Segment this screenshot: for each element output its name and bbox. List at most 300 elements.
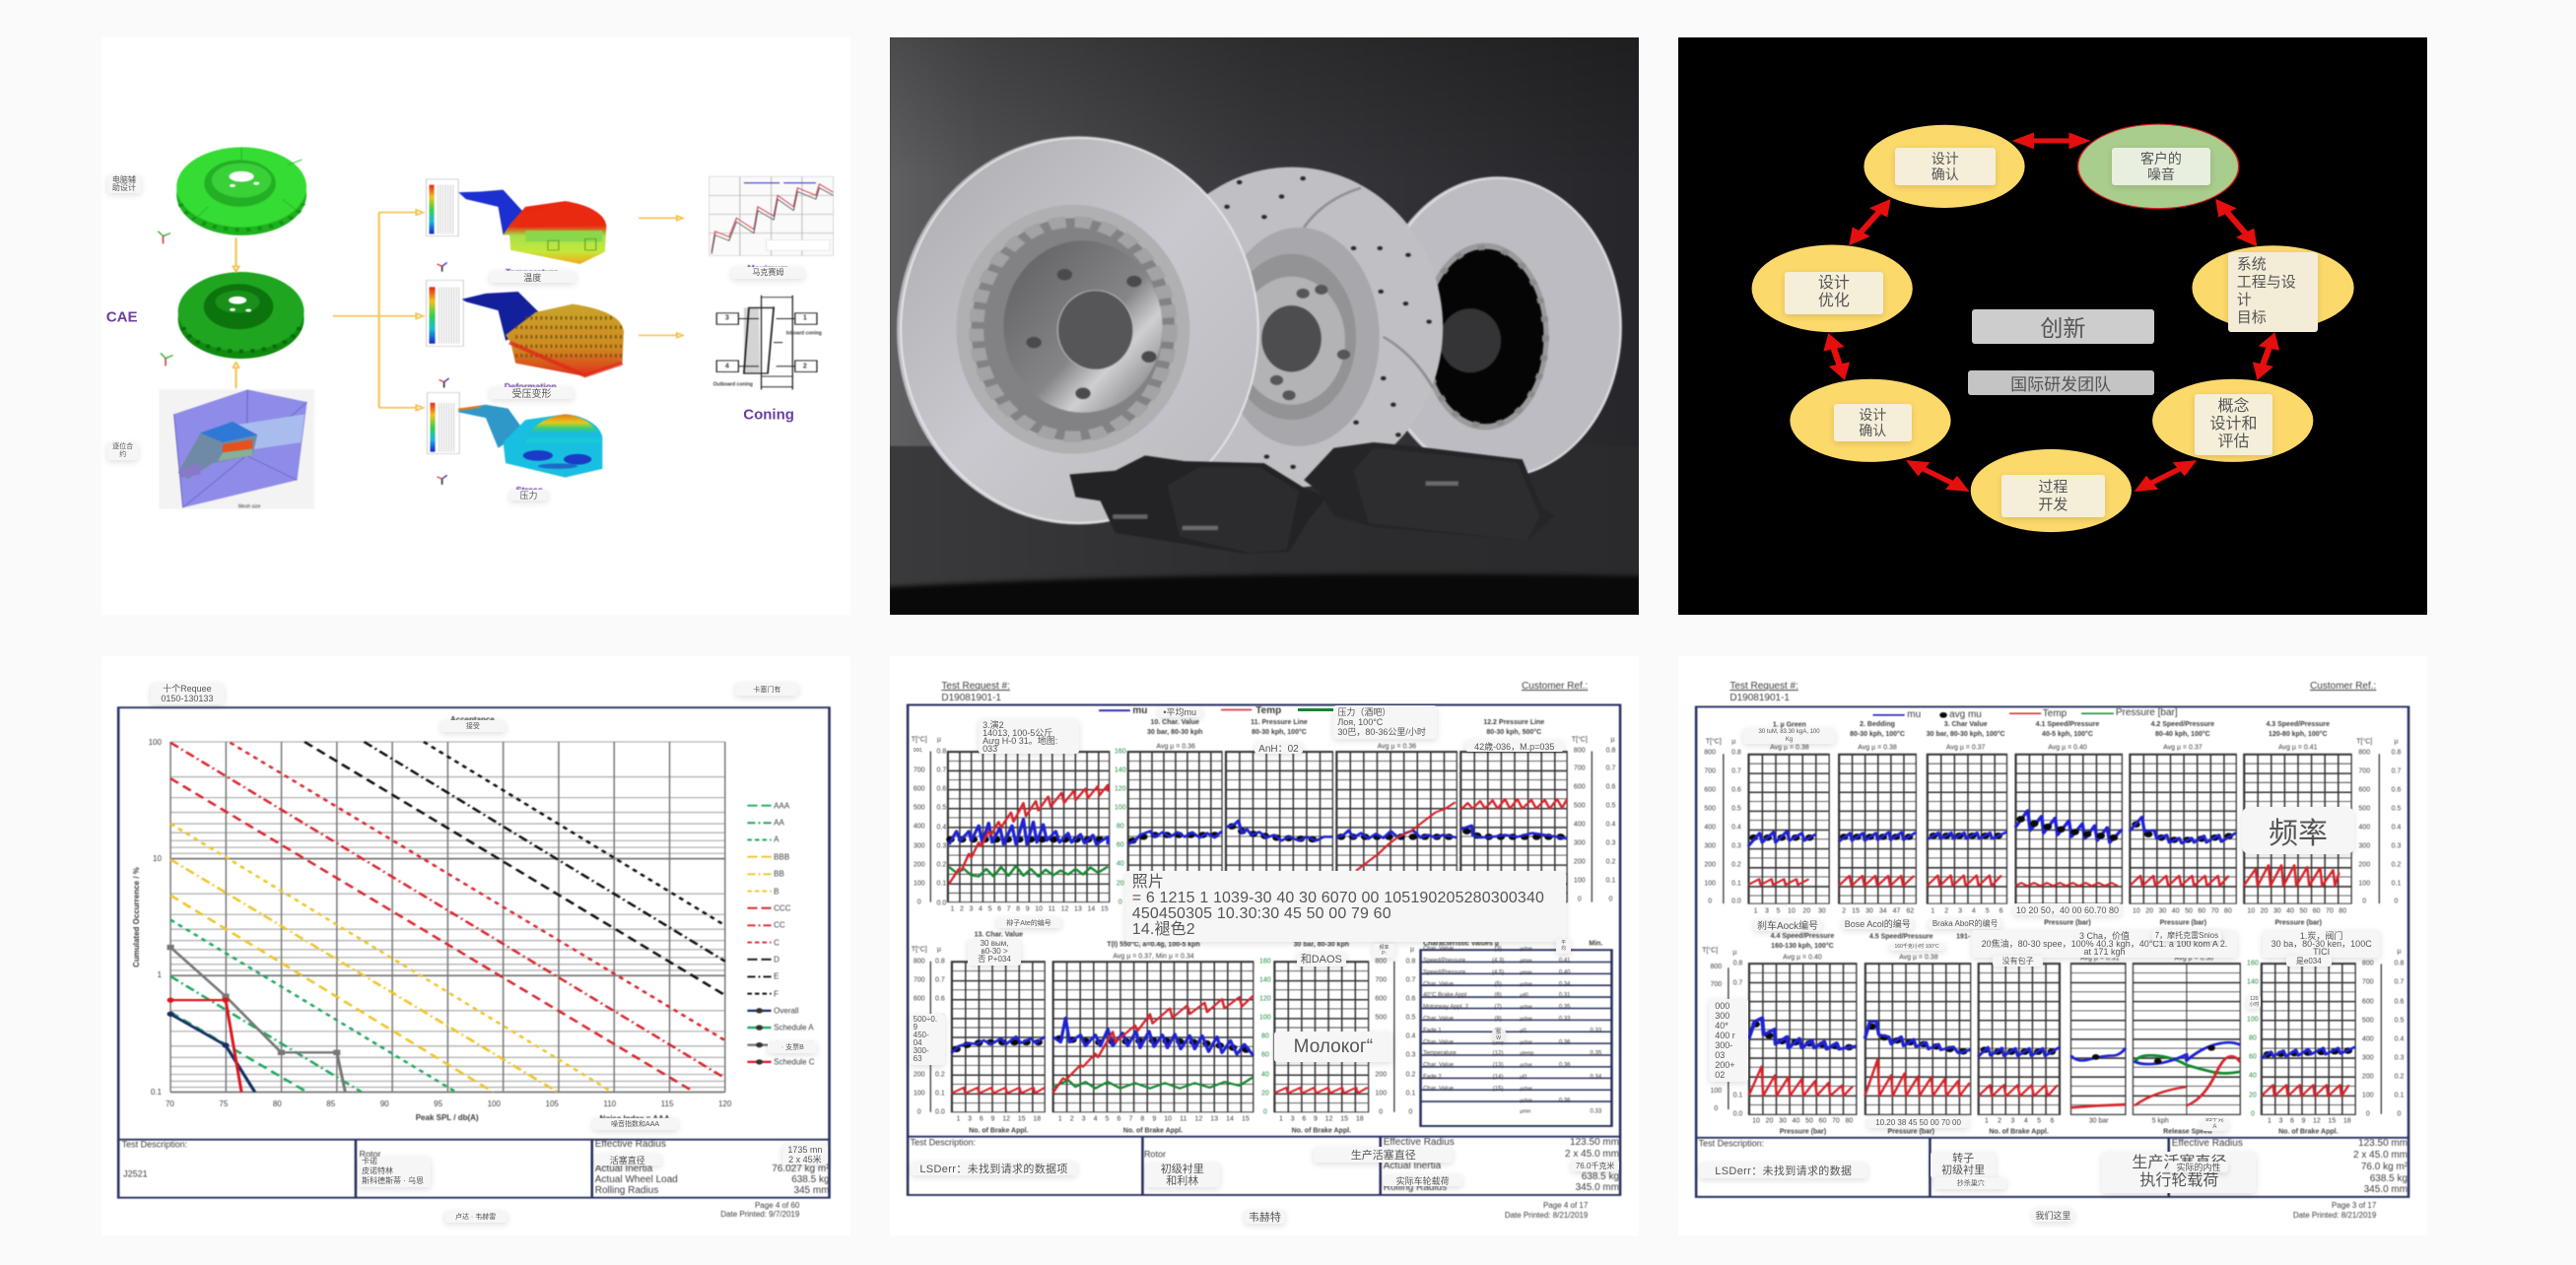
callout: green mu condition: 30 tuM, 83.30 kgA, 100	[1759, 729, 1820, 735]
callout: temperature	[490, 271, 576, 283]
report text and chart titles	[1698, 680, 2408, 1220]
report text and chart titles: 200	[1375, 1071, 1387, 1078]
report text and chart titles: 0	[2251, 1110, 2255, 1117]
callout: acceptance: 接受	[466, 723, 480, 730]
callout: rotor number: 辩子Ate的编号	[1006, 920, 1051, 927]
callout: kg note: A	[2212, 1124, 2216, 1130]
report text and chart titles: Page 3 of 17	[2332, 1201, 2376, 1210]
report text and chart titles: D19081901-1	[941, 693, 1001, 703]
callout: left axis values: 300	[1715, 1011, 1729, 1021]
plot axis and legend text: Peak SPL / db(A)	[416, 1113, 479, 1122]
callout: left axis values: 400 r	[1715, 1031, 1735, 1040]
report text and chart titles: µchar	[1520, 947, 1532, 953]
callout: tester name: 卢达 · 韦赫雷	[455, 1214, 496, 1221]
plot axis and legend text: Actual Inertia	[595, 1164, 652, 1174]
report text and chart titles: 100	[2358, 880, 2370, 887]
report text and chart titles: 200	[914, 1071, 925, 1078]
callout: small speed note	[1889, 943, 1945, 951]
report text and chart titles: 0.7	[1406, 976, 1415, 983]
callout: valve condition: 30 ba，80-30 ken，100C	[2271, 939, 2372, 949]
report text and chart titles: 300	[914, 842, 925, 849]
report text and chart titles: 80	[1261, 1033, 1269, 1040]
callout: concept design: 评估	[2217, 433, 2249, 450]
report text and chart titles: 0.1	[1733, 1093, 1742, 1099]
report text and chart titles: 638.5 kg	[2370, 1173, 2407, 1184]
report text and chart titles: 800	[2362, 961, 2374, 967]
report text and chart titles: 0.1	[1406, 1090, 1415, 1097]
callout: process development: 过程	[2038, 479, 2068, 496]
report text and chart titles: 700	[914, 976, 925, 983]
report text and chart titles: 100	[1375, 1090, 1387, 1097]
callout: schedule B	[768, 1041, 817, 1053]
report text and chart titles: 300	[1704, 842, 1716, 849]
report text and chart titles: Avg µ = 0.37, Min µ = 0.34	[1113, 953, 1194, 960]
report text and chart titles: Char. Value	[1423, 981, 1454, 987]
callout: contact: 逐位合	[112, 443, 133, 450]
report text and chart titles: µ	[937, 737, 941, 744]
small diagram text: 1	[803, 315, 807, 322]
icon: green brake disc CAD model	[176, 147, 306, 235]
callout: test 3 condition: Aưg H-0 31。地图:	[983, 736, 1057, 746]
callout: left axis values: 40*	[1715, 1021, 1729, 1031]
callout: process development: 开发	[2038, 497, 2068, 513]
report text and chart titles: 0	[1708, 899, 1712, 905]
report text and chart titles: 1. µ Green	[1773, 721, 1806, 728]
report text and chart titles: µf2	[1520, 1075, 1526, 1081]
report text and chart titles: µf1	[1520, 1028, 1526, 1033]
report text and chart titles: 0.1	[1606, 878, 1615, 885]
callout: char value condition: at 171 kgh	[2083, 947, 2126, 957]
callout: test 3 condition	[979, 719, 1079, 754]
report text and chart titles: 638.5 kg	[1582, 1171, 1619, 1182]
plot axis and legend text: 76.027 kg m²	[772, 1164, 830, 1174]
report text and chart titles: D19081901-1	[1729, 693, 1790, 703]
report text and chart titles: 120-80 kph, 100°C	[2269, 731, 2328, 738]
report text and chart titles: 0.41	[1559, 959, 1571, 965]
chart: deformation contour model	[426, 280, 624, 376]
plot axis and legend text: Date Printed: 9/7/2019	[720, 1210, 799, 1219]
report text and chart titles: (5)	[1494, 981, 1502, 987]
report text and chart titles: 0.1	[935, 1090, 945, 1097]
report text and chart titles: 0.7	[2395, 979, 2404, 986]
callout: inertia value: 76.0千克米	[1576, 1162, 1614, 1170]
report text and chart titles: 0.7	[2392, 768, 2401, 775]
callout: left axis values: 200+	[1715, 1060, 1735, 1070]
callout: average mu legend: •平均mu	[1163, 707, 1196, 717]
report text and chart titles: 1 3 6 9 12 15 18	[956, 1115, 1041, 1122]
report text and chart titles: 0.8	[2392, 750, 2401, 757]
callout: systems engineering	[2228, 252, 2318, 332]
callout: left axis values: 02	[1715, 1070, 1725, 1080]
callout: average 12.2: 42歳-036，M.p=035	[1474, 742, 1554, 752]
report text and chart titles: Page 4 of 17	[1543, 1201, 1588, 1210]
icon: axis triads	[158, 232, 449, 485]
callout: lookup error description: LSDerr：未找到请求的数据项	[919, 1164, 1068, 1175]
report text and chart titles: 0.2	[2395, 1073, 2404, 1080]
report text and chart titles: 0.4	[1606, 822, 1615, 829]
report text and chart titles: 100	[2362, 1092, 2374, 1099]
report text and chart titles: µ	[1410, 947, 1414, 954]
report text and chart titles: Effective Radius	[2172, 1138, 2243, 1149]
report text and chart titles: T[°C]	[1702, 948, 1718, 955]
legend samples	[1872, 713, 2114, 715]
chart: pressure line 12.2	[1460, 752, 1567, 902]
report text and chart titles: 0.8	[937, 748, 946, 755]
plot axis and legend text	[121, 715, 830, 1219]
report text and chart titles: 3. Char Value	[1944, 721, 1988, 728]
callout: deformation	[490, 387, 574, 399]
report text and chart titles: 500	[2358, 805, 2370, 812]
report text and chart titles: Avg µ = 0.40	[2048, 744, 2087, 751]
report text and chart titles: µ	[2397, 949, 2402, 956]
arrow: disc mesh flow up	[234, 237, 239, 388]
callout: DAOS	[1297, 952, 1346, 966]
report text and chart titles: T[°C]	[912, 947, 927, 954]
report text and chart titles: 0.3	[1731, 842, 1741, 849]
callout: speed axis note: 120	[2250, 996, 2259, 1002]
report text and chart titles: 400	[914, 824, 925, 831]
report text and chart titles: µchar	[1520, 1086, 1532, 1092]
chart: release speed	[2133, 964, 2240, 1114]
report text and chart titles: T[°C]	[1572, 737, 1588, 744]
callout: contact: 约	[119, 451, 126, 458]
report text and chart titles: 0.6	[1606, 784, 1615, 791]
chart: pressure line 11	[1226, 752, 1332, 902]
report text and chart titles: 700	[2358, 768, 2370, 775]
report text and chart titles: 4.2 Speed/Pressure	[2151, 721, 2214, 728]
plot axis and legend text: 10	[153, 854, 162, 863]
report text and chart titles: 345.0 mm	[1576, 1182, 1619, 1193]
report text and chart titles: 345.0 mm	[2364, 1184, 2407, 1195]
report text and chart titles: 0.31	[1559, 993, 1571, 999]
report text and chart titles: 0	[1379, 1108, 1383, 1115]
callout: small table note: W	[1496, 1035, 1501, 1041]
report text and chart titles: µmax	[1520, 969, 1532, 975]
report text and chart titles: 0.34	[1591, 1075, 1601, 1081]
report text and chart titles: 0.1	[2395, 1092, 2404, 1099]
callout: design validation lower: 设计	[1859, 407, 1886, 423]
callout: caliper: 卡塞门有	[753, 687, 780, 694]
panel: friction test report page 3	[1678, 656, 2427, 1235]
callout: wheel load	[1383, 1174, 1462, 1186]
callout: char value condition	[1972, 930, 2237, 958]
callout: left axis values	[1709, 999, 1748, 1082]
report text and chart titles: mu	[1132, 705, 1147, 716]
callout: char value condition: 3 Cha，价值	[2079, 931, 2130, 941]
report text and chart titles: Char. Value	[1423, 1039, 1454, 1045]
callout: maximum	[731, 267, 804, 279]
report text and chart titles: Avg µ = 0.38	[1770, 744, 1809, 751]
report text and chart titles: T[°C]	[2356, 738, 2372, 745]
report text and chart titles: Effective Radius	[1384, 1137, 1455, 1148]
report text and chart titles: 0.4	[1731, 824, 1741, 831]
heading: innovation	[1972, 309, 2154, 344]
callout: process development	[2001, 475, 2105, 517]
report text and chart titles: 120	[1259, 995, 1271, 1002]
report text and chart titles: 2 15 30 34 47 62	[1842, 907, 1914, 914]
callout: left axis values	[910, 1014, 945, 1065]
callout: average small	[1556, 939, 1571, 954]
callout: radius values	[782, 1144, 828, 1165]
report text and chart titles: 100	[1259, 1015, 1271, 1022]
plot axis and legend text: Effective Radius	[595, 1139, 666, 1150]
report text and chart titles: 600	[2358, 787, 2370, 794]
report text and chart titles: 0.35	[1559, 1005, 1571, 1011]
report text and chart titles: 700	[1375, 976, 1387, 983]
report text and chart titles: 800	[1574, 747, 1586, 754]
report text and chart titles: T[°C]	[1706, 738, 1722, 745]
callout: piston diameter	[1314, 1147, 1453, 1163]
report text and chart titles: 12.2 Pressure Line	[1483, 719, 1544, 726]
report text and chart titles: 0.5	[1606, 803, 1615, 810]
report text and chart titles: 0	[2366, 1110, 2370, 1117]
callout: design validation: 设计	[1932, 151, 1959, 166]
report text and chart titles: (13)	[1493, 1063, 1503, 1069]
report text and chart titles: 2 x 45.0 mm	[2353, 1150, 2407, 1161]
callout: fade data block	[1125, 871, 1566, 942]
report text and chart titles: No. of Brake Appl.	[2278, 1129, 2339, 1136]
report text and chart titles: 30 bar, 80-30 kph, 100°C	[1927, 731, 2005, 738]
plot axis and legend text: Schedule C	[774, 1057, 814, 1066]
plot axis and legend text: Acceptance	[450, 715, 495, 724]
report text and chart titles: 1 3 6 9 12 15 18	[1279, 1115, 1364, 1122]
callout: pressure ticks lower	[1867, 1116, 1969, 1128]
report text and chart titles: No. of Brake Appl.	[1989, 1129, 2049, 1136]
callout: char value condition: 20焦油，80-30 spee，100% 40.3 kgh，40°C1. a 100 kom A 2.	[1982, 939, 2227, 949]
plot axis and legend text: Rotor	[359, 1150, 380, 1160]
callout: design optimization: 优化	[1818, 293, 1850, 309]
callout: rotor notes	[358, 1157, 430, 1187]
plot axis and legend text: 70 75 80 85 90 95 100 105 110 115 120	[166, 1099, 731, 1108]
callout: green mu condition	[1743, 728, 1835, 743]
report frame	[908, 704, 1620, 1195]
callout: top axis	[911, 747, 925, 756]
callout: rotor notes: 卡诺	[362, 1157, 377, 1165]
report text and chart titles: 300	[1574, 840, 1586, 847]
report text and chart titles: 700	[2362, 979, 2374, 986]
callout: design optimization	[1785, 272, 1883, 314]
callout: small table note: 额	[1496, 1030, 1501, 1035]
callout: green mu condition: Kg	[1786, 737, 1793, 743]
callout: bose number: Bose Acol的编号	[1845, 919, 1911, 929]
report text and chart titles: 0.5	[937, 805, 946, 812]
chart: test 3 fade	[947, 752, 1110, 902]
report text and chart titles: 0.3	[1606, 840, 1615, 847]
plot axis and legend text: 345 mm	[793, 1185, 830, 1196]
callout: pressure legend line	[1298, 708, 1333, 711]
arrow: bidirectional red cycle arrows	[1831, 141, 2272, 488]
report text and chart titles: Customer Ref.:	[1522, 681, 1588, 692]
report text and chart titles: µ	[2394, 738, 2399, 745]
callout: average 12.2	[1465, 740, 1564, 752]
callout: frequency small: P:	[1382, 951, 1387, 957]
report text and chart titles: 0.6	[2395, 998, 2404, 1005]
report text and chart titles: 800	[1704, 750, 1716, 757]
chart: acceptance plot	[170, 742, 725, 1093]
callout: rotor notes: 斯科德斯蒂 · 乌恩	[362, 1176, 424, 1185]
axis lines	[1724, 754, 2381, 1114]
report text and chart titles: 40-5 kph, 100°C	[2042, 731, 2093, 738]
label: CAE: CAE	[106, 309, 137, 326]
callout: radius values: 2 x 45米	[788, 1155, 822, 1165]
report text and chart titles: 0	[2395, 899, 2398, 905]
report text and chart titles: Min.	[1589, 940, 1602, 947]
report text and chart titles: Pressure (bar)	[1888, 1129, 1934, 1136]
chart: speed pressure 4.1	[2015, 754, 2122, 903]
plot axis and legend text: CC	[774, 920, 785, 929]
report text and chart titles: 4.5 Speed/Pressure	[1869, 933, 1933, 940]
chart: coning diagram	[716, 296, 817, 389]
report text and chart titles: Speed/Pressure	[1423, 969, 1465, 975]
small diagram text: Inboard coning	[786, 331, 822, 337]
report text and chart titles: 500	[1704, 805, 1716, 812]
legend: rating line samples	[747, 806, 772, 1062]
report text and chart titles: 500	[1375, 1015, 1387, 1022]
callout: inertia value	[1571, 1160, 1619, 1171]
callout: speed axis note: 小时	[2249, 1002, 2259, 1008]
report text and chart titles: 140	[2247, 978, 2259, 985]
report text and chart titles: Motorway Appl. 2	[1423, 1005, 1468, 1011]
report text and chart titles: avg mu	[1949, 709, 1982, 720]
report text and chart titles: 40	[1117, 861, 1124, 868]
callout: stress: 压力	[519, 491, 538, 500]
report text and chart titles: 0	[2362, 899, 2366, 905]
plot axis and legend text: 100	[149, 738, 162, 747]
callout: concept design: 概念	[2217, 398, 2249, 415]
report text and chart titles: 0.3	[2395, 1054, 2404, 1061]
report text and chart titles: µ	[1611, 737, 1615, 744]
report text and chart titles: 10 20 30 40 50 60 70 80	[2133, 907, 2232, 914]
report text and chart titles: 0.8	[1731, 750, 1741, 757]
small diagram text	[238, 263, 822, 509]
report text and chart titles: µmax	[1520, 959, 1532, 965]
callout: pressure condition: 30巴，80-36公里/小时	[1337, 727, 1426, 737]
callout: test request: 十个Requee	[163, 684, 212, 694]
report text and chart titles: 30 bar, 80-30 kph	[1147, 729, 1202, 736]
report text and chart titles: 0.0	[935, 1108, 945, 1115]
callout: piston diameter: 活塞直径	[610, 1156, 645, 1165]
callout: systems engineering: 工程与设	[2237, 274, 2296, 291]
icon: thermal flow domain box	[159, 389, 314, 509]
report text and chart titles: 40°C Brake Appl	[1423, 993, 1466, 999]
plot axis and legend text: 0.1	[151, 1088, 162, 1097]
report text and chart titles: 200	[1704, 861, 1716, 868]
report text and chart titles: 0	[2398, 1110, 2401, 1117]
callout: frequency	[2242, 807, 2354, 854]
report text and chart titles: 600	[914, 995, 925, 1002]
callout: computer-aided design	[107, 175, 141, 193]
heading: global R&D team	[1968, 370, 2154, 395]
report text and chart titles: 500	[1574, 803, 1586, 810]
callout: radius values: 1735 mn	[787, 1145, 822, 1155]
report text and chart titles: Avg µ = 0.38	[1858, 744, 1897, 751]
callout: DAOS: 和DAOS	[1301, 954, 1342, 965]
report text and chart titles: 100	[1574, 878, 1586, 885]
callout: voice of customer: 噪音	[2147, 166, 2175, 182]
chart: fade 14	[1052, 962, 1254, 1112]
callout: test 3 condition: 3.演2	[983, 720, 1004, 730]
report text and chart titles: Temperature	[1423, 1051, 1457, 1057]
report text and chart titles: 600	[1704, 787, 1716, 794]
report text and chart titles: 10. Char. Value	[1150, 719, 1199, 726]
report text and chart titles: Char. Value	[1423, 1063, 1454, 1069]
report text and chart titles: (9)	[1494, 1028, 1502, 1033]
report text and chart titles: 2. Bedding	[1860, 721, 1895, 728]
panel: CAE simulation workflow	[102, 37, 850, 615]
panel: innovation cycle diagram	[1678, 37, 2427, 615]
callout: wheel load: 实际车轮载荷	[1396, 1176, 1450, 1186]
report text and chart titles: 20	[1261, 1090, 1269, 1097]
report text and chart titles: 80	[2249, 1035, 2257, 1042]
report text and chart titles: 0.3	[935, 1052, 945, 1059]
report text and chart titles: Avg µ = 0.40	[1783, 955, 1822, 962]
callout: valve condition: 1.炭，阀门	[2300, 931, 2342, 941]
report text and chart titles: µchar	[1520, 1017, 1532, 1023]
report text and chart titles: 0.36	[1559, 1039, 1571, 1045]
legend line samples	[1099, 708, 1130, 713]
report text and chart titles: 0.7	[1606, 766, 1615, 772]
report text and chart titles: 0.6	[937, 785, 946, 792]
callout: test 3 condition: 14013, 100-5公斤	[983, 728, 1052, 738]
chart: max temperature line thumbnail	[710, 176, 834, 256]
report text and chart titles: 600	[1574, 784, 1586, 791]
report text and chart titles: Pressure [bar]	[2116, 707, 2178, 718]
report text and chart titles: Rotor	[1144, 1149, 1166, 1159]
callout: frequency: 频率	[2269, 818, 2328, 850]
report text and chart titles: 800	[914, 958, 925, 965]
report text and chart titles: 0.36	[1559, 1063, 1571, 1069]
callout: test 13 condition: 否 P+034	[978, 955, 1011, 964]
callout: valve condition: TICI	[2313, 947, 2330, 957]
plot axis and legend text: F	[774, 989, 779, 998]
callout: small speed note: 160千克/小时 100°C	[1895, 944, 1939, 950]
callout: stress	[509, 490, 548, 500]
report text and chart titles: 1 2 3 4 5 6 7 8 9 10 11 12 13 14 15	[950, 906, 1109, 913]
report text and chart titles: (6)	[1494, 993, 1502, 999]
report text and chart titles: 0.6	[935, 995, 945, 1002]
callout: rotor notes: 皮诺特林	[362, 1166, 393, 1175]
report text and chart titles: 20	[2249, 1092, 2257, 1099]
callout: left axis values: 000	[1715, 1001, 1729, 1011]
report text and chart titles: µchar	[1520, 1098, 1532, 1103]
report text and chart titles: 0	[1578, 897, 1582, 903]
report text and chart titles: Char. Value	[1423, 947, 1454, 953]
report text and chart titles: Avg µ = 0.41	[2278, 744, 2317, 751]
heading: global R&D team: 国际研发团队	[2010, 375, 2111, 394]
callout: e034: 是e034	[2296, 957, 2322, 965]
report text and chart titles: (4.3)	[1492, 959, 1504, 965]
icon: rear plain disc	[1374, 176, 1622, 478]
callout: braka number: Braka AboR的编号	[1932, 919, 1999, 928]
report text and chart titles: 160-130 kph, 100°C	[1771, 943, 1834, 950]
report text and chart titles: µmin	[1520, 1109, 1530, 1115]
callout: top axis: 900,	[914, 748, 923, 754]
callout: primary lining	[1145, 1163, 1220, 1187]
callout: pressure ticks: 10 20 50，40 00 60.70 80	[2016, 905, 2119, 915]
photo floor	[877, 446, 1652, 632]
report text and chart titles: 1 2 3 4 5 6	[1985, 1118, 2054, 1125]
report text and chart titles: Test Request #:	[1729, 681, 1798, 692]
callout: large word	[1274, 1032, 1392, 1062]
report text and chart titles: Speed/Pressure	[1423, 959, 1465, 965]
chart: value at 30 bar	[1274, 962, 1369, 1112]
plot axis and legend text: Schedule B	[774, 1040, 814, 1049]
report text and chart titles: (7)	[1494, 1005, 1502, 1011]
callout: left axis values: 300-	[1715, 1040, 1732, 1050]
callout: design validation	[1895, 148, 1996, 185]
callout: left axis values: 03	[1715, 1050, 1725, 1060]
callout: test 3 condition: 033	[983, 744, 997, 754]
